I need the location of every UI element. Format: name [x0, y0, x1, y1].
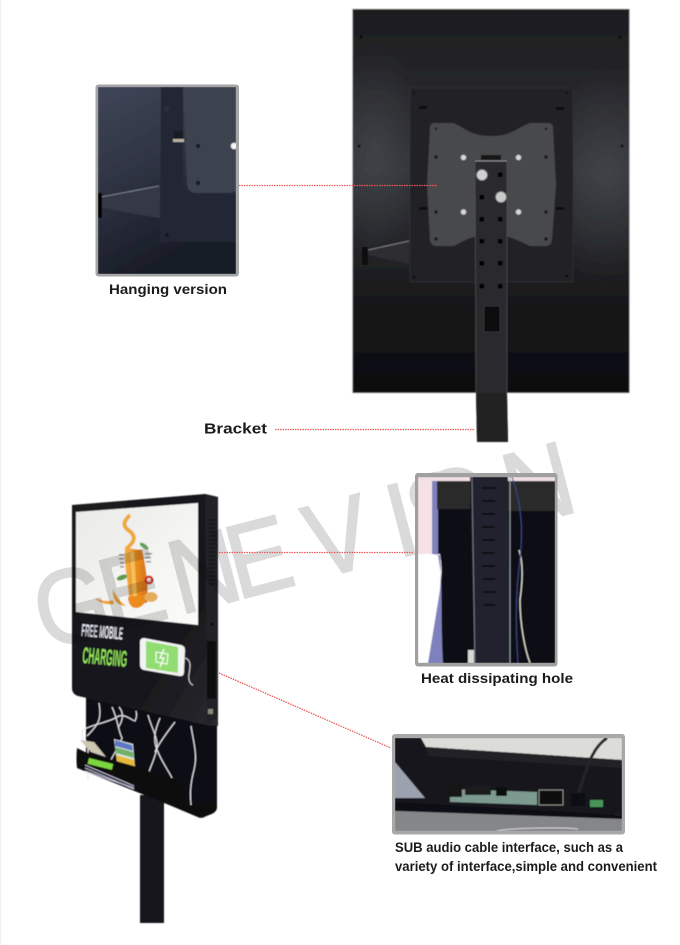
caption: bracket: Bracket	[204, 420, 267, 438]
raised mounting plate	[410, 88, 573, 282]
silver bolts on plate	[461, 155, 521, 215]
rear panel	[352, 9, 630, 393]
panel: front view of charging kiosk	[72, 494, 218, 923]
plate shadow	[160, 87, 236, 242]
rear cable panel	[86, 695, 217, 818]
advertising screen	[76, 503, 198, 625]
caption: audio interface	[395, 840, 657, 874]
tray	[76, 748, 217, 818]
leader line: bracket	[275, 428, 475, 430]
panel: rear view of display with bracket	[352, 8, 630, 443]
panel: audio interface photo	[392, 734, 625, 834]
photo frame	[392, 734, 625, 834]
vent slots	[209, 520, 215, 584]
slots on plate	[362, 106, 564, 265]
ports	[450, 789, 537, 805]
panel screws	[358, 35, 624, 388]
caption: audio interface: variety of interface,simple and convenient	[395, 859, 657, 874]
leader line: hanging version	[239, 184, 437, 186]
caption: hanging version: Hanging version	[109, 281, 227, 297]
photo frame	[415, 473, 558, 666]
hook	[100, 186, 160, 218]
phones in tray	[80, 740, 106, 757]
bracket plate	[183, 87, 236, 193]
leader line: heat hole	[219, 552, 414, 554]
bracket plate holes	[434, 128, 548, 241]
bracket pole	[475, 161, 508, 442]
stand pole	[140, 795, 164, 923]
icon: charging phone	[140, 638, 193, 685]
VESA bracket plate	[427, 123, 556, 246]
pole bolts	[476, 170, 488, 180]
photo frame	[96, 84, 239, 276]
panel: heat dissipating hole photo	[415, 473, 558, 666]
caption: audio interface: SUB audio cable interface, such as a	[395, 840, 623, 855]
pole holes	[480, 172, 502, 288]
vent slots	[482, 488, 495, 605]
charging cables	[82, 703, 196, 805]
hanging hook	[368, 241, 409, 264]
panel: hanging version photo	[96, 84, 239, 276]
orange peel artwork	[95, 515, 158, 608]
panel: front view of charging kiosk: CHARGING	[82, 643, 128, 672]
free mobile charging text: FREE MOBILE	[81, 620, 124, 643]
watermark: GENEVISION	[21, 420, 586, 672]
front display housing	[72, 494, 218, 726]
caption: heat dissipating hole: Heat dissipating hole	[421, 670, 573, 686]
leader line: audio interface	[219, 673, 391, 748]
